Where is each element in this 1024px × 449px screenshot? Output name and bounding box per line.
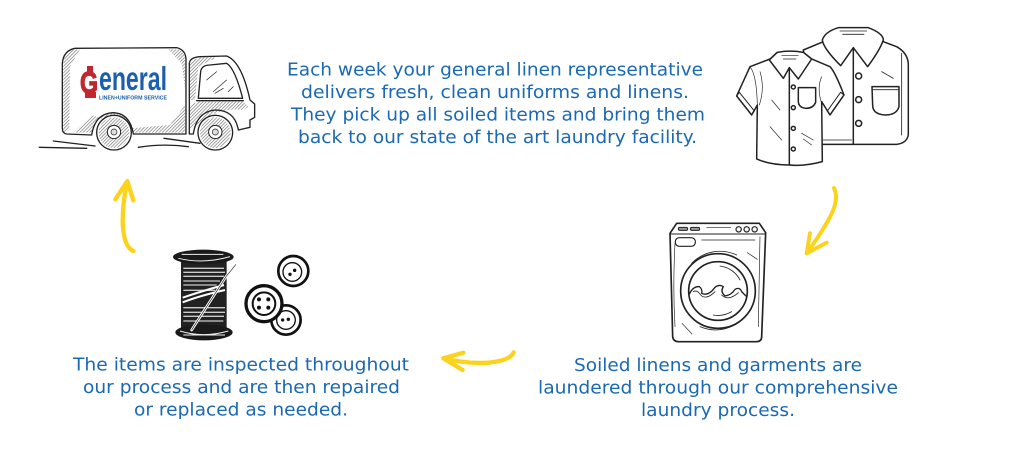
back shirt	[803, 28, 908, 144]
text: weekly delivery description: delivers fresh, clean uniforms and linens.	[301, 82, 689, 103]
text: inspection and repair description: The items are inspected throughout	[72, 355, 409, 376]
text: weekly delivery description: Each week your general linen representative	[287, 60, 703, 80]
spool	[173, 250, 236, 340]
arrow: repairs to truck	[115, 181, 133, 251]
truck body hatching	[63, 49, 248, 137]
arrow: shirts to washer	[807, 188, 836, 253]
buttons	[246, 256, 308, 335]
text: inspection and repair description	[72, 355, 409, 421]
text: weekly delivery description	[287, 60, 705, 148]
icon: shirts	[737, 28, 908, 165]
logo: General Linen and Uniform Service: LINEN+UNIFORM SERVICE	[99, 96, 167, 102]
icon: thread spool and buttons	[173, 250, 308, 340]
text: laundering description	[538, 355, 898, 421]
text: laundering description: Soiled linens and garments are	[574, 355, 862, 376]
logo: General Linen and Uniform Service: eneral	[99, 60, 167, 97]
front shirt	[737, 51, 844, 165]
logo: General Linen and Uniform Service	[80, 60, 167, 102]
text: inspection and repair description: or replaced as needed.	[134, 400, 348, 421]
text: laundering description: laundered through our comprehensive	[538, 378, 898, 398]
text: laundering description: laundry process.	[641, 400, 795, 421]
truck outline	[39, 48, 255, 148]
icon: washing machine	[670, 223, 766, 342]
text: weekly delivery description: back to our state of the art laundry facility.	[298, 127, 697, 148]
text: inspection and repair description: our process and are then repaired	[83, 377, 400, 398]
truck wheels	[97, 115, 233, 150]
text: weekly delivery description: They pick up all soiled items and bring them	[290, 105, 705, 126]
icon: delivery truck with General logo	[39, 48, 255, 150]
logo: General Linen and Uniform Service: G	[80, 65, 98, 100]
arrow: washer to repairs	[443, 352, 514, 370]
